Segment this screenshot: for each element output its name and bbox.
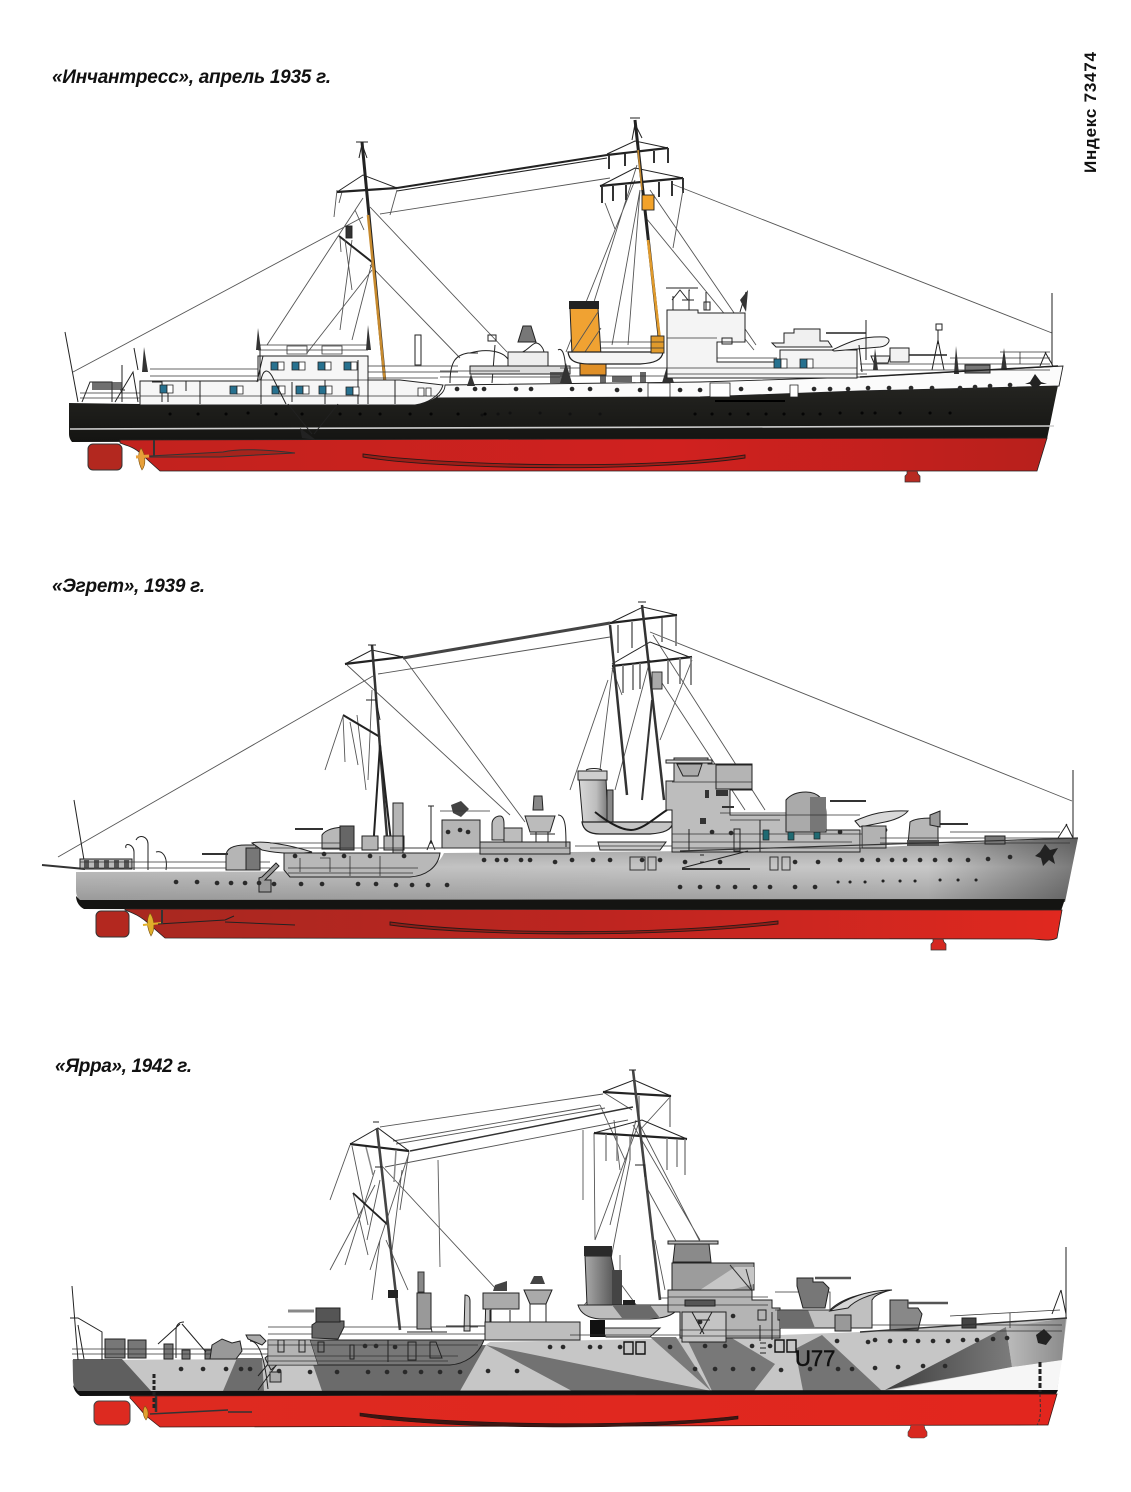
bridge [666, 288, 867, 378]
rudder [88, 444, 122, 470]
bilge keel [363, 454, 745, 468]
mid platform [525, 796, 566, 847]
hull number: U77 [795, 1346, 835, 1371]
title: Egret: «Эгрет», 1939 г. [52, 576, 205, 597]
funnel rails and ladders [600, 342, 664, 348]
rigging and aerials [73, 141, 1052, 372]
ventilator block [651, 336, 664, 353]
deck edge [680, 838, 1078, 851]
rigging and aerials [330, 1080, 730, 1310]
funnel [578, 768, 613, 824]
portholes and fittings [154, 1329, 1052, 1425]
forward deckhouse windows [774, 359, 813, 368]
aft superstructure [268, 1272, 580, 1365]
aft superstructure [259, 801, 570, 892]
ship's boats [570, 1298, 710, 1337]
forward sonar dome [931, 939, 946, 950]
white hull strake [436, 366, 1063, 398]
bilge keel [390, 921, 778, 934]
propeller and shaft [143, 1396, 252, 1420]
dazzle camouflage patches [73, 1318, 1066, 1391]
forward deck and guns [775, 1247, 1067, 1332]
black waterline [73, 1385, 1058, 1396]
masts [366, 602, 664, 850]
aft superstructure [65, 325, 458, 440]
title: Yarra: «Ярра», 1942 г. [55, 1056, 192, 1077]
title: Enchantress: «Инчантресс», апрель 1935 г. [52, 67, 331, 88]
rudder [94, 1401, 130, 1425]
ship profile: Egret 1939 [42, 602, 1078, 950]
grey hull [76, 838, 1078, 902]
midship boat deck [415, 326, 674, 386]
funnel [569, 301, 606, 375]
bilge keel [360, 1413, 738, 1427]
ship profile: Enchantress 1935 [65, 118, 1063, 482]
masts [373, 1070, 660, 1330]
rudder [96, 911, 129, 937]
aft guns [202, 826, 354, 870]
cabin windows [160, 362, 431, 396]
ship's boat [568, 352, 663, 364]
portholes and hull markings [176, 844, 1058, 887]
grey hull base [72, 1318, 1067, 1392]
fore and main masts [346, 118, 660, 383]
stern fittings [42, 800, 270, 870]
ship's boats [575, 810, 680, 850]
black hull [69, 366, 1062, 442]
ship profile: Yarra 1942 [70, 1070, 1067, 1438]
funnel [584, 1246, 622, 1305]
red underwater hull [130, 1394, 1057, 1427]
propeller and shaft [143, 910, 295, 936]
bridge [668, 1241, 818, 1342]
forward guns [772, 320, 947, 372]
fore deck fittings [860, 293, 1058, 377]
bridge [666, 758, 885, 852]
black boot topping [76, 896, 1065, 911]
page index label: Индекс 73474 [1081, 51, 1100, 173]
stern fittings [70, 1286, 287, 1390]
rigging and aerials [58, 607, 1072, 857]
propeller and shaft [136, 440, 295, 470]
forward sonar dome [908, 1425, 927, 1438]
forward sonar dome [905, 471, 920, 482]
red underwater hull [125, 909, 1062, 940]
boot top stripe [70, 426, 1054, 429]
portholes [170, 374, 1047, 415]
forward gun positions [780, 770, 1073, 848]
red underwater hull [120, 438, 1047, 471]
